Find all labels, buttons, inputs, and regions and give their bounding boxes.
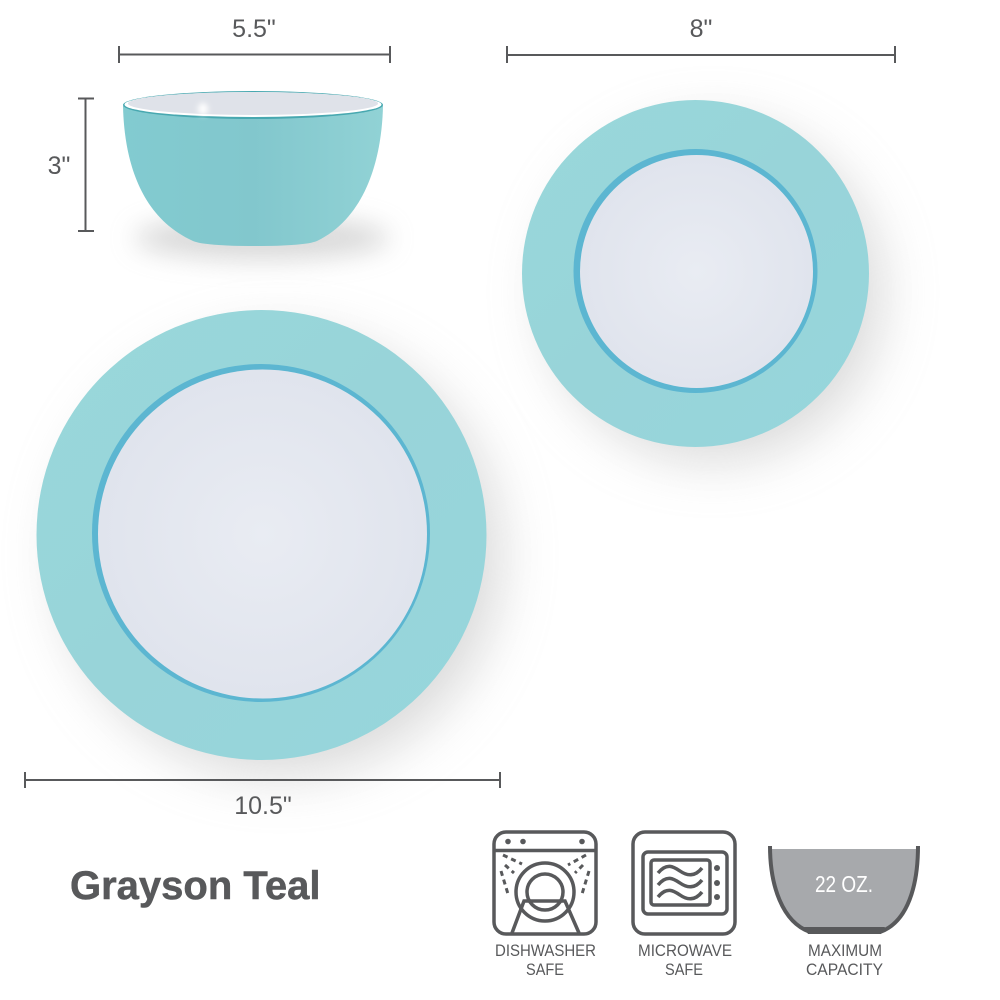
panel: dinner plate — [36, 310, 502, 777]
label: 22 oz: 22 OZ. — [815, 871, 873, 897]
bowl shadow — [134, 216, 390, 260]
dimension: salad plate width — [507, 46, 895, 63]
label: 5.5 inch: 5.5" — [232, 15, 276, 43]
bowl white lip — [124, 92, 382, 117]
bowl highlight — [198, 103, 208, 115]
dinner plate teal ring — [92, 364, 430, 702]
dinner plate centre — [98, 370, 427, 698]
salad plate centre — [580, 155, 813, 388]
label: maximum capacity — [806, 942, 883, 979]
label: 8 inch: 8" — [690, 15, 712, 43]
icon: microwave — [633, 832, 735, 934]
dimension: dinner plate width — [25, 772, 500, 788]
icon: dishwasher — [494, 832, 596, 934]
dinner plate shadow — [58, 333, 502, 777]
salad plate teal ring — [574, 149, 818, 393]
title: Grayson Teal — [70, 864, 320, 908]
dinner plate rim — [36, 310, 486, 760]
icon: bowl capacity — [770, 846, 918, 934]
label: maximum capacity: MAXIMUM — [808, 942, 882, 960]
label: microwave safe: MICROWAVE — [638, 942, 732, 960]
label: dishwasher safe: DISHWASHER — [495, 942, 596, 960]
panel: salad plate — [522, 100, 883, 462]
dimension: bowl height — [78, 98, 94, 232]
dimension: bowl width — [119, 46, 390, 63]
label: dishwasher safe — [495, 942, 596, 979]
bowl rim — [123, 91, 383, 119]
label: 10.5 inch: 10.5" — [234, 792, 292, 820]
label: microwave safe: SAFE — [665, 961, 703, 979]
salad plate rim — [522, 100, 869, 447]
label: dishwasher safe: SAFE — [526, 961, 564, 979]
salad plate shadow — [543, 122, 883, 462]
label: 3 inch: 3" — [48, 152, 70, 180]
label: microwave safe — [638, 942, 732, 979]
bowl interior — [128, 92, 378, 115]
panel: bowl — [123, 91, 390, 260]
bowl body — [123, 106, 383, 246]
label: maximum capacity: CAPACITY — [806, 961, 883, 979]
